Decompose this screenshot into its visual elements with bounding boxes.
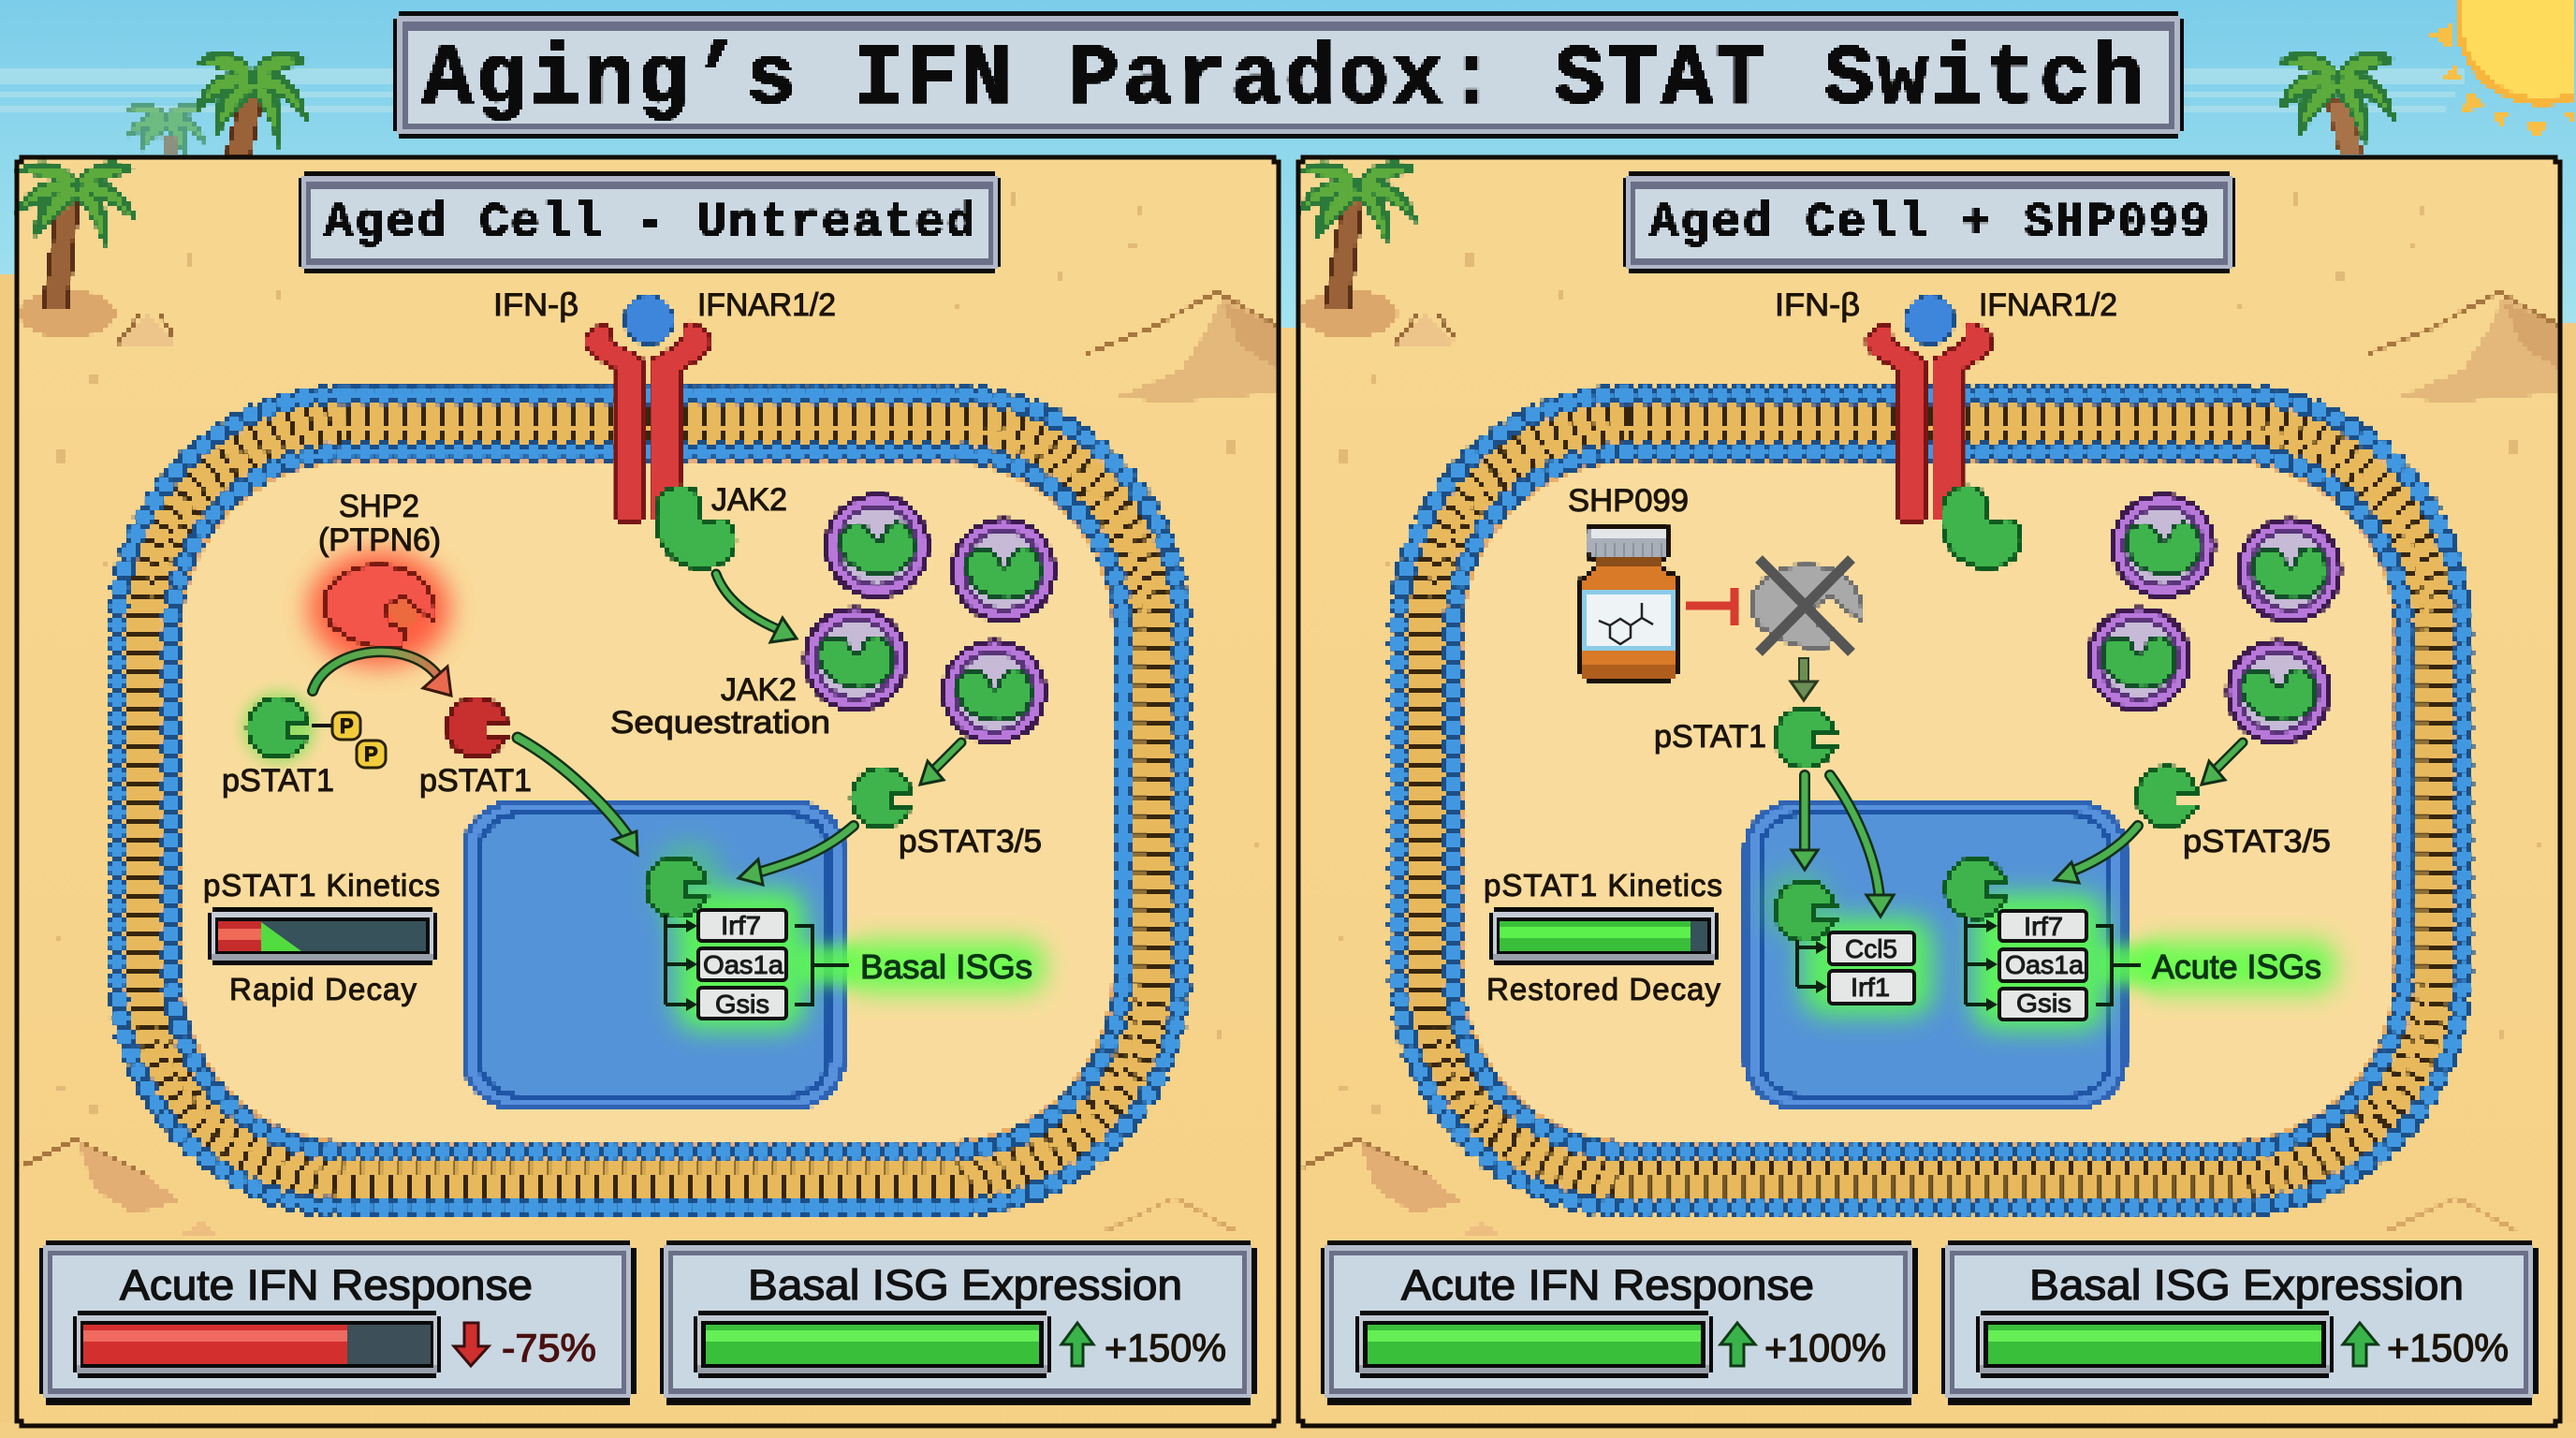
icons: molecules bbox=[1580, 296, 2340, 941]
labels: molecules: IFN-β bbox=[1775, 287, 1860, 323]
receptor IFNAR with IFN-beta bbox=[1866, 296, 1992, 522]
arrow: pSTAT1 to Ccl5 bbox=[1830, 775, 1894, 917]
pSTAT1 active bbox=[248, 697, 308, 757]
sequestered JAK2 vesicles bbox=[2088, 495, 2340, 742]
pSTAT1 kinetics gauge: pSTAT1 Kinetics bbox=[1484, 868, 1722, 902]
pSTAT1 kinetics gauge: Rapid Decay bbox=[229, 972, 417, 1006]
molecule drawing on bottle bbox=[1599, 603, 1653, 644]
arrow: dephosphorylation bbox=[313, 652, 451, 696]
panel border bbox=[17, 157, 1279, 1426]
labels: molecules: pSTAT1 bbox=[1654, 719, 1766, 755]
nucleus bbox=[1743, 799, 2128, 1111]
nuclear pSTAT1 bbox=[1776, 881, 1836, 941]
gene cluster: Ccl5 and Irf1: Ccl5 bbox=[1845, 934, 1897, 963]
arrow: JAK2 sequestration bbox=[716, 574, 797, 642]
labels: molecules: IFNAR1/2 bbox=[1979, 287, 2117, 323]
metric: acute IFN response down 75% bbox=[39, 1240, 637, 1405]
phosphate groups bbox=[332, 712, 386, 768]
pSTAT1 kinetics gauge: Restored Decay bbox=[1486, 972, 1720, 1006]
inhibition line bbox=[1686, 588, 1734, 625]
label: basal ISGs: Basal ISGs bbox=[860, 947, 1032, 986]
labels: molecules bbox=[1568, 287, 2331, 859]
metric: acute IFN response up 100% bbox=[1321, 1240, 1918, 1405]
panel scenery and sand bbox=[1296, 157, 2560, 1426]
gene cluster: acute ISGs: Oas1a bbox=[2005, 950, 2084, 979]
nuclear STAT bbox=[647, 858, 707, 917]
labels: molecules: P bbox=[340, 714, 354, 738]
arrow: to nucleus bbox=[518, 738, 637, 855]
metric: basal ISG expression up 150% bbox=[1941, 1240, 2539, 1405]
metric: acute IFN response down 75%: -75% bbox=[502, 1326, 596, 1370]
labels: molecules: pSTAT1 bbox=[222, 763, 334, 799]
label: acute ISGs: Acute ISGs bbox=[2152, 947, 2321, 986]
heading: aged cell untreated: Aged Cell - Untreated bbox=[324, 196, 975, 251]
inhibited SHP2 enzyme bbox=[1751, 565, 1863, 648]
gene cluster: Ccl5 and Irf1: Irf1 bbox=[1851, 973, 1890, 1002]
gene cluster: acute ISGs bbox=[1966, 911, 2141, 1020]
labels: molecules: P bbox=[364, 742, 378, 766]
metric: basal ISG expression up 150%: Basal ISG Expression bbox=[2029, 1261, 2464, 1309]
gene cluster: basal ISGs: Oas1a bbox=[703, 950, 783, 979]
arrow: pSTAT3/5 to nucleus bbox=[739, 826, 854, 885]
glow: gene expression bbox=[243, 550, 1044, 1030]
pSTAT3/5 bbox=[852, 768, 912, 828]
X mark over enzyme bbox=[1759, 559, 1852, 653]
labels: molecules: SHP099 bbox=[1568, 483, 1689, 519]
metric: basal ISG expression up 150%: +150% bbox=[1105, 1326, 1226, 1370]
labels: molecules: Sequestration bbox=[610, 705, 830, 741]
dephosphorylated pSTAT1 bbox=[447, 697, 507, 757]
SHP2 enzyme bbox=[324, 565, 435, 648]
title banner bbox=[393, 11, 2184, 139]
heading: aged cell plus SHP099 bbox=[1623, 171, 2235, 273]
drug bottle bbox=[1580, 526, 1679, 681]
metric: acute IFN response up 100%: +100% bbox=[1764, 1326, 1886, 1370]
labels: molecules: pSTAT3/5 bbox=[899, 824, 1042, 859]
labels: molecules: IFNAR1/2 bbox=[697, 287, 836, 323]
nuclear pSTAT3/5 bbox=[1946, 858, 2006, 918]
labels: molecules: SHP2 bbox=[339, 489, 419, 524]
icon: sky palm trees bbox=[125, 51, 2395, 162]
labels: molecules: pSTAT1 bbox=[419, 763, 532, 799]
pSTAT1 kinetics gauge bbox=[203, 868, 440, 1006]
sequestered JAK2 vesicles bbox=[805, 495, 1054, 742]
labels: molecules bbox=[222, 287, 1042, 859]
arrow: vesicle to pSTAT3/5 bbox=[920, 742, 961, 785]
JAK2 kinase bbox=[656, 487, 735, 568]
receptor IFNAR with IFN-beta bbox=[585, 296, 710, 522]
pSTAT1 kinetics gauge: pSTAT1 Kinetics bbox=[203, 868, 440, 902]
labels: molecules: pSTAT3/5 bbox=[2183, 824, 2331, 859]
panel: aged cell untreated bbox=[15, 157, 1279, 1426]
gene cluster: basal ISGs: Gsis bbox=[715, 990, 769, 1019]
labels: molecules: (PTPN6) bbox=[318, 522, 441, 558]
metric: basal ISG expression up 150% bbox=[660, 1240, 1257, 1405]
gene cluster: acute ISGs: Gsis bbox=[2016, 989, 2071, 1018]
panel: aged cell plus SHP099 bbox=[1296, 157, 2560, 1426]
arrow: pSTAT3/5 to nucleus bbox=[2055, 826, 2138, 883]
arrow: vesicle to pSTAT3/5 bbox=[2202, 742, 2243, 785]
icon: sun bbox=[2430, 0, 2576, 140]
pSTAT1 bbox=[1776, 708, 1836, 768]
title text: Aging’s IFN Paradox: STAT Switch bbox=[422, 33, 2144, 128]
pSTAT1 kinetics gauge bbox=[1484, 868, 1722, 1006]
labels: molecules: JAK2 bbox=[711, 482, 787, 518]
heading: aged cell untreated bbox=[299, 171, 1001, 273]
labels: molecules: IFN-β bbox=[493, 287, 578, 323]
gene cluster: basal ISGs: Irf7 bbox=[721, 911, 761, 940]
metric: basal ISG expression up 150%: +150% bbox=[2387, 1326, 2509, 1370]
gene cluster: acute ISGs: Irf7 bbox=[2024, 912, 2063, 941]
gene cluster: Ccl5 and Irf1 bbox=[1797, 932, 1914, 1004]
panel scenery and sand bbox=[15, 157, 1279, 1426]
JAK2 kinase bbox=[1942, 487, 2021, 568]
metric: basal ISG expression up 150%: Basal ISG Expression bbox=[748, 1261, 1182, 1309]
panel border bbox=[1298, 157, 2560, 1426]
labels: molecules: JAK2 bbox=[721, 672, 797, 708]
heading: aged cell plus SHP099: Aged Cell + SHP099 bbox=[1649, 196, 2209, 251]
gene cluster: basal ISGs bbox=[666, 910, 849, 1019]
metric: acute IFN response down 75%: Acute IFN Response bbox=[120, 1261, 533, 1309]
glow: gene expression bbox=[1764, 871, 2335, 1030]
pSTAT3/5 bbox=[2137, 767, 2197, 827]
arrow: pSTAT1 to nuclear pSTAT1 bbox=[1792, 775, 1818, 870]
metric: acute IFN response up 100%: Acute IFN Response bbox=[1401, 1261, 1814, 1309]
icons: molecules bbox=[248, 296, 1054, 917]
arrow: restored signal bbox=[1791, 658, 1817, 700]
nucleus bbox=[461, 799, 846, 1111]
